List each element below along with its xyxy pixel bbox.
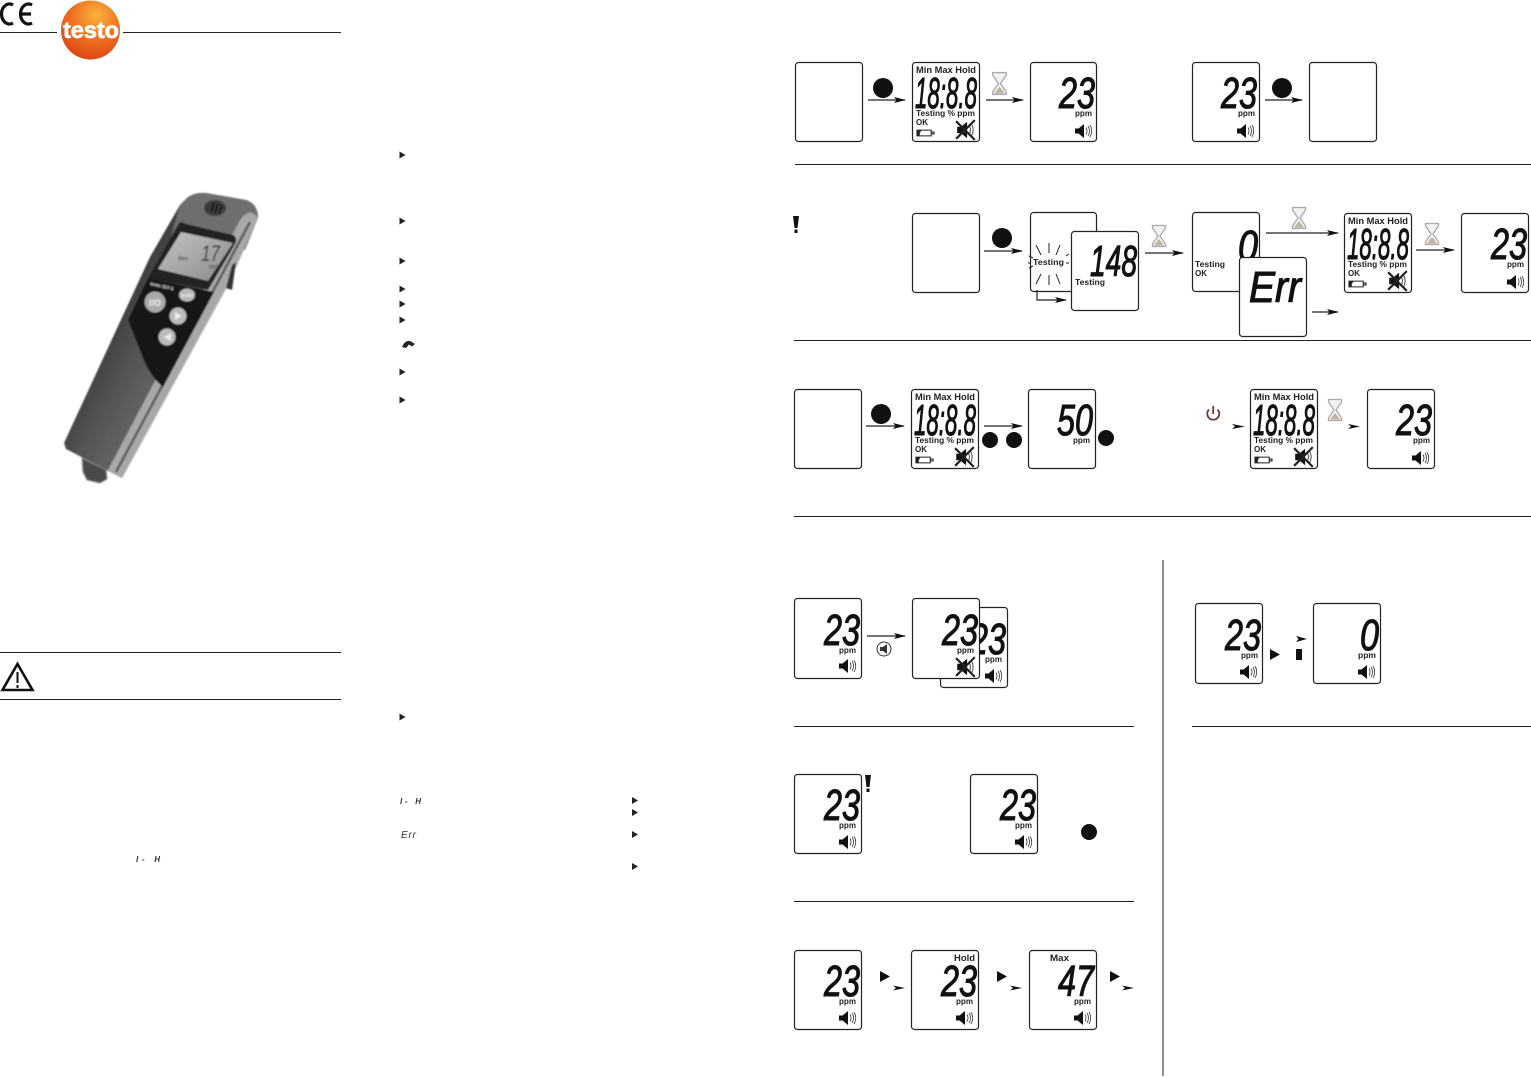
full display	[1344, 214, 1412, 292]
full display: Min Max Hold	[915, 392, 975, 403]
reading 23 ppm	[1192, 62, 1260, 142]
reading 23 ppm: ppm	[1507, 260, 1524, 269]
reading 23 ppm	[1030, 62, 1096, 142]
full display: Testing % ppm	[1348, 260, 1407, 269]
panel: hold and max	[794, 950, 1134, 1030]
device top section	[170, 193, 258, 250]
full display	[1250, 390, 1318, 468]
reading 23 ppm: 23	[1224, 611, 1261, 660]
reading 23 ppm rear	[940, 608, 1008, 688]
reading 23 ppm: 23	[999, 781, 1036, 830]
buttons: testo	[181, 293, 193, 299]
icon: hourglass	[1152, 226, 1166, 246]
divider	[794, 516, 1531, 518]
icon: phone	[402, 341, 415, 348]
icon: power	[1207, 406, 1219, 420]
full display: OK	[915, 445, 927, 454]
button key	[1098, 430, 1114, 446]
button key	[871, 404, 891, 424]
arrow	[1265, 99, 1302, 101]
reading 23 ppm muted	[912, 598, 980, 678]
arrow	[1312, 311, 1338, 313]
full display: OK	[1348, 269, 1360, 278]
button key	[873, 78, 893, 98]
reading 23 ppm: 23	[1220, 69, 1257, 118]
reading 23 ppm: ppm	[1015, 821, 1032, 830]
reading 23 ppm	[1462, 214, 1528, 292]
test OK display: OK	[1195, 269, 1207, 278]
icon: hourglass	[1328, 400, 1342, 420]
right key	[1270, 649, 1280, 660]
reading 23 ppm muted: 23	[941, 606, 978, 655]
fault table symbols: I- H	[400, 797, 421, 806]
arrowhead	[1296, 636, 1307, 642]
full display	[912, 390, 978, 468]
reading 23 ppm: ppm	[1075, 109, 1092, 118]
reading 23 ppm: ppm	[839, 821, 856, 830]
button key	[1272, 78, 1292, 98]
key and arrowhead	[1110, 971, 1134, 990]
reading 23 ppm	[794, 598, 862, 678]
max reading 47 ppm	[1030, 950, 1096, 1030]
device LCD: ppm	[209, 264, 220, 270]
blank display	[796, 62, 862, 142]
key and arrowhead	[997, 971, 1022, 990]
arrowhead	[1232, 424, 1245, 429]
icon: sound key	[877, 642, 891, 656]
arrow	[1145, 252, 1183, 254]
reading 50 ppm: ppm	[1073, 436, 1090, 445]
button key	[992, 228, 1012, 248]
flashing testing display: Testing	[1033, 258, 1064, 267]
error display	[1240, 258, 1306, 336]
hold reading 23 ppm: ppm	[956, 997, 973, 1006]
mini display glyphs in text: I- H	[136, 855, 160, 864]
buttons: I/O	[149, 298, 161, 308]
max reading 47 ppm: 47	[1058, 957, 1095, 1006]
keypad panel	[128, 278, 214, 387]
display bezel	[148, 222, 236, 290]
arrow	[1416, 249, 1454, 251]
error display: Err	[1249, 263, 1303, 312]
header rule right	[123, 32, 341, 34]
reading 23 ppm	[1368, 390, 1434, 468]
panel: mute alarm	[794, 598, 1008, 688]
button key	[1081, 824, 1097, 840]
loop arrow	[1037, 290, 1066, 300]
reading 23 ppm: ppm	[839, 646, 856, 655]
reading 23 ppm rear: ppm	[985, 655, 1002, 664]
left key	[1296, 649, 1302, 660]
device label: testo 317-3	[150, 281, 174, 291]
hold reading 23 ppm: Hold	[954, 953, 975, 964]
reading 0 ppm: ppm	[1358, 651, 1376, 660]
test OK display	[1192, 212, 1260, 292]
full display: OK	[916, 118, 928, 127]
icon: CE mark	[2, 4, 32, 24]
full display: Min Max Hold	[1348, 216, 1408, 227]
bullet triangles: instruction list	[400, 152, 406, 720]
buttons	[144, 288, 195, 346]
device LCD: Max	[178, 256, 188, 262]
device LCD	[158, 232, 233, 281]
reading 23 ppm	[794, 950, 862, 1030]
reading 23 ppm: 23	[823, 606, 860, 655]
arrow	[867, 635, 905, 637]
panel: bump test	[793, 208, 1528, 336]
side clip	[226, 262, 236, 290]
full display: Testing % ppm	[916, 109, 975, 118]
reading 23 ppm: ppm	[1241, 651, 1258, 660]
divider	[1192, 726, 1531, 728]
panel: reset values	[1196, 604, 1380, 684]
arrow	[1266, 232, 1338, 234]
reading 0 ppm: 0	[1360, 611, 1379, 660]
full display	[912, 62, 980, 142]
icon: hourglass	[993, 73, 1006, 94]
panel: alarm threshold	[794, 390, 1434, 468]
bullet triangles: fault table	[632, 797, 638, 870]
icon: hourglass	[1426, 224, 1438, 244]
reading 23 ppm: 23	[1058, 69, 1095, 118]
arrow	[866, 425, 904, 427]
reading 23 ppm: ppm	[1238, 109, 1255, 118]
divider	[794, 340, 1531, 342]
reading 23 ppm: ppm	[1413, 436, 1430, 445]
device photo: testo 317-3	[64, 193, 258, 483]
reading 50 ppm	[1028, 390, 1096, 468]
icon: exclamation mark	[793, 216, 799, 233]
full display: Testing % ppm	[915, 436, 974, 445]
icon: warning triangle	[2, 664, 32, 690]
reading 23 ppm	[794, 774, 862, 854]
reading 23 ppm	[1196, 604, 1262, 684]
blank display	[912, 214, 980, 292]
panel: alarm	[794, 774, 1097, 854]
divider	[794, 900, 1134, 902]
reading 148 during test: 148	[1090, 237, 1137, 286]
full display: Min Max Hold	[1254, 392, 1314, 403]
blank display	[1310, 62, 1376, 142]
reading 148 during test: Testing	[1075, 278, 1105, 287]
device side stripe	[108, 212, 258, 478]
test OK display: Testing	[1195, 260, 1225, 269]
device body	[64, 193, 258, 478]
flashing testing display	[1028, 212, 1096, 292]
reading 23 ppm rear: 23	[969, 615, 1006, 664]
reading 50 ppm: 50	[1057, 396, 1093, 445]
reading 148 during test	[1072, 232, 1138, 310]
battery clip	[82, 458, 107, 483]
arrow	[986, 99, 1023, 101]
test OK display: 0	[1238, 222, 1258, 271]
fault table symbols	[400, 797, 421, 841]
reading 0 ppm	[1314, 604, 1380, 684]
full display: 18:8.8	[1253, 396, 1315, 445]
hold reading 23 ppm: 23	[940, 957, 977, 1006]
reading 23 ppm muted: ppm	[957, 646, 974, 655]
full display: 18:8.8	[1347, 220, 1409, 269]
column divider	[1162, 560, 1164, 1076]
reading 23 ppm: ppm	[839, 997, 856, 1006]
warning rule bottom	[0, 698, 341, 700]
arrowhead	[1348, 424, 1360, 429]
logo: testo ball	[61, 0, 120, 60]
icon: hourglass	[1292, 208, 1306, 228]
full display: 18:8.8	[914, 396, 976, 445]
arrow	[984, 250, 1022, 252]
arrow	[868, 99, 905, 101]
device LCD: 17	[201, 241, 221, 266]
icon: exclamation mark	[865, 775, 871, 792]
header rule left	[0, 32, 57, 34]
blank display	[794, 390, 862, 468]
reading 23 ppm: 23	[1395, 396, 1432, 445]
hold reading 23 ppm	[912, 950, 978, 1030]
key and arrowhead	[880, 971, 905, 990]
reading 23 ppm	[970, 774, 1038, 854]
logo: testo ball: testo	[63, 17, 119, 43]
full display: Testing % ppm	[1254, 436, 1313, 445]
fault table symbols: Err	[401, 830, 417, 841]
full display: Min Max Hold	[916, 65, 976, 76]
button keys	[982, 432, 1022, 448]
divider	[795, 164, 1531, 166]
max reading 47 ppm: Max	[1050, 953, 1070, 964]
full display: 18:8.8	[915, 69, 977, 118]
arrow	[984, 425, 1022, 427]
warning rule top	[0, 652, 341, 654]
full display: OK	[1254, 445, 1266, 454]
panel: switch on / off	[796, 62, 1376, 142]
sensor grille	[204, 200, 226, 216]
reading 23 ppm: 23	[823, 957, 860, 1006]
reading 23 ppm: 23	[823, 781, 860, 830]
max reading 47 ppm: ppm	[1074, 997, 1091, 1006]
divider	[794, 726, 1134, 728]
